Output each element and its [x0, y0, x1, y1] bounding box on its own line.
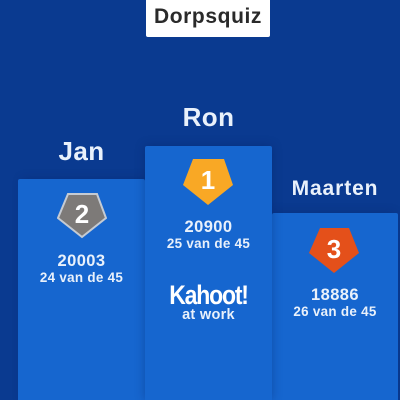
- name: Jan: Jan: [58, 136, 104, 166]
- name: Ron: Ron: [183, 102, 234, 132]
- name: Maarten: Maarten: [292, 177, 378, 200]
- score: 20003: 20003: [58, 252, 105, 270]
- icon: silver badge 2: [57, 193, 107, 238]
- score: 18886: 18886: [311, 286, 359, 304]
- panel: first place: [145, 146, 272, 400]
- icon: orange badge 3: 3: [327, 234, 341, 264]
- title: Dorpsquiz: [154, 5, 262, 28]
- answers: 24 van de 45: 24 van de 45: [40, 270, 123, 285]
- panel: second place: [18, 179, 145, 400]
- text: at work: at work: [182, 307, 235, 323]
- icon: gold badge 1: 1: [201, 165, 215, 195]
- icon: gold badge 1: [183, 159, 233, 205]
- logo: Kahoot!: Kahoot!: [169, 280, 248, 310]
- title: [146, 0, 270, 37]
- score: 20900: 20900: [185, 218, 232, 236]
- icon: silver badge 2: 2: [75, 199, 89, 229]
- answers: 26 van de 45: 26 van de 45: [293, 304, 377, 319]
- answers: 25 van de 45: 25 van de 45: [167, 236, 250, 251]
- panel: third place: [272, 213, 398, 400]
- icon: orange badge 3: [309, 228, 359, 273]
